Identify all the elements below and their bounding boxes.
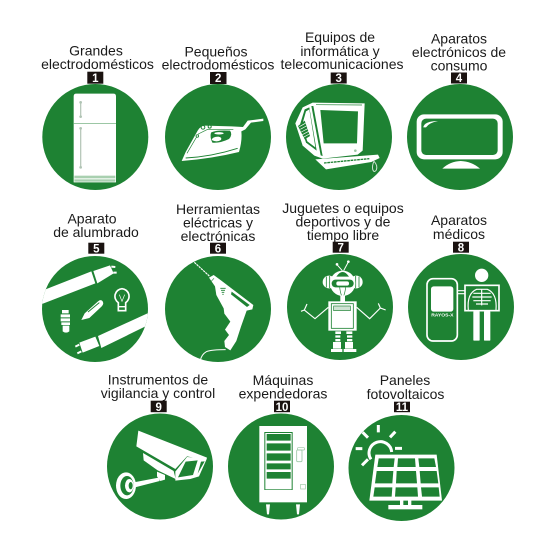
item 11: paneles fotovoltaicos — [348, 372, 454, 521]
icon: x-ray: RAYOS-X — [431, 313, 454, 319]
heading 3: Equipos de — [305, 29, 375, 45]
icon: iron — [182, 119, 263, 161]
badge 5: 5 — [93, 244, 100, 256]
heading 6: Herramientas — [176, 201, 260, 217]
badge 6: 6 — [215, 244, 221, 256]
item 5: alumbrado — [39, 210, 150, 362]
heading 9: Instrumentos de — [108, 372, 208, 388]
heading 3: informática y — [300, 43, 380, 59]
item 7: juguetes — [282, 200, 404, 360]
heading 10: expendedoras — [239, 386, 327, 402]
heading 9: vigilancia y control — [101, 385, 215, 401]
badge 4: 4 — [456, 73, 463, 85]
heading 1: Grandes — [69, 42, 123, 58]
item 9: vigilancia — [101, 372, 215, 520]
icon: solar panel — [356, 425, 442, 509]
icon: television — [417, 114, 503, 169]
badge 1: 1 — [92, 73, 99, 85]
heading 5: Aparato — [67, 210, 117, 226]
badge 9: 9 — [155, 402, 162, 414]
icon: lamps — [39, 265, 150, 353]
heading 7: tiempo libre — [307, 227, 379, 243]
heading 2: electrodomésticos — [162, 56, 274, 72]
heading 4: Aparatos — [431, 30, 487, 46]
circle 11 — [348, 415, 454, 521]
badge 2: 2 — [215, 73, 221, 85]
badge 8 — [453, 242, 469, 254]
heading 7: Juguetes o equipos — [282, 200, 404, 216]
badge 7 — [333, 242, 349, 254]
item 2: pequeños electrodomésticos — [162, 44, 274, 190]
badge 7: 7 — [337, 242, 344, 254]
heading 6: electrónicas — [181, 228, 255, 244]
badge 3 — [331, 72, 347, 85]
circle 4 — [407, 84, 513, 190]
badge 3: 3 — [335, 73, 342, 85]
heading 11: fotovoltaicos — [367, 386, 444, 402]
heading 5: de alumbrado — [53, 224, 139, 240]
badge 5 — [88, 243, 104, 256]
item 8: médicos — [408, 212, 514, 360]
badge 9 — [151, 401, 167, 414]
icon: drill — [194, 262, 253, 360]
badge 2 — [210, 72, 226, 85]
badge 4 — [451, 72, 467, 85]
circle 8 — [408, 254, 514, 360]
icon: vending machine — [259, 426, 307, 514]
circle 1 — [42, 84, 148, 190]
circle 3 — [286, 84, 392, 190]
heading 10: Máquinas — [253, 372, 313, 388]
heading 7: deportivos y de — [296, 214, 391, 230]
heading 2: Pequeños — [184, 44, 248, 60]
heading 3: telecomunicaciones — [281, 56, 403, 72]
icon: x-ray — [427, 269, 499, 341]
item 6: herramientas — [165, 201, 271, 362]
badge 10: 10 — [276, 402, 288, 414]
icon: camera — [116, 431, 207, 499]
circle 6 — [165, 256, 271, 362]
item 10: máquinas expendedoras — [228, 372, 334, 520]
icon: robot — [301, 260, 386, 352]
badge 8: 8 — [458, 242, 465, 254]
badge 11: 11 — [396, 402, 409, 414]
circle 7 — [287, 254, 393, 360]
heading 8: médicos — [433, 226, 485, 242]
badge 1 — [87, 72, 103, 85]
circle 10 — [228, 414, 334, 520]
circle 9 — [107, 414, 213, 520]
heading 11: Paneles — [380, 372, 430, 388]
circle 2 — [165, 84, 271, 190]
icon: fridge — [74, 94, 116, 182]
heading 8: Aparatos — [431, 212, 487, 228]
heading 4: electrónicos de — [412, 44, 506, 60]
item 4: electrónicos de consumo — [407, 30, 513, 190]
item 3: informática — [281, 29, 403, 190]
badge 6 — [210, 243, 226, 256]
heading 4: consumo — [431, 58, 488, 74]
circle 5 — [42, 256, 148, 362]
heading 6: eléctricas y — [183, 214, 253, 230]
item 1: grandes electrodomésticos — [41, 42, 154, 190]
heading 1: electrodomésticos — [41, 56, 154, 72]
icon: computer — [295, 103, 380, 172]
